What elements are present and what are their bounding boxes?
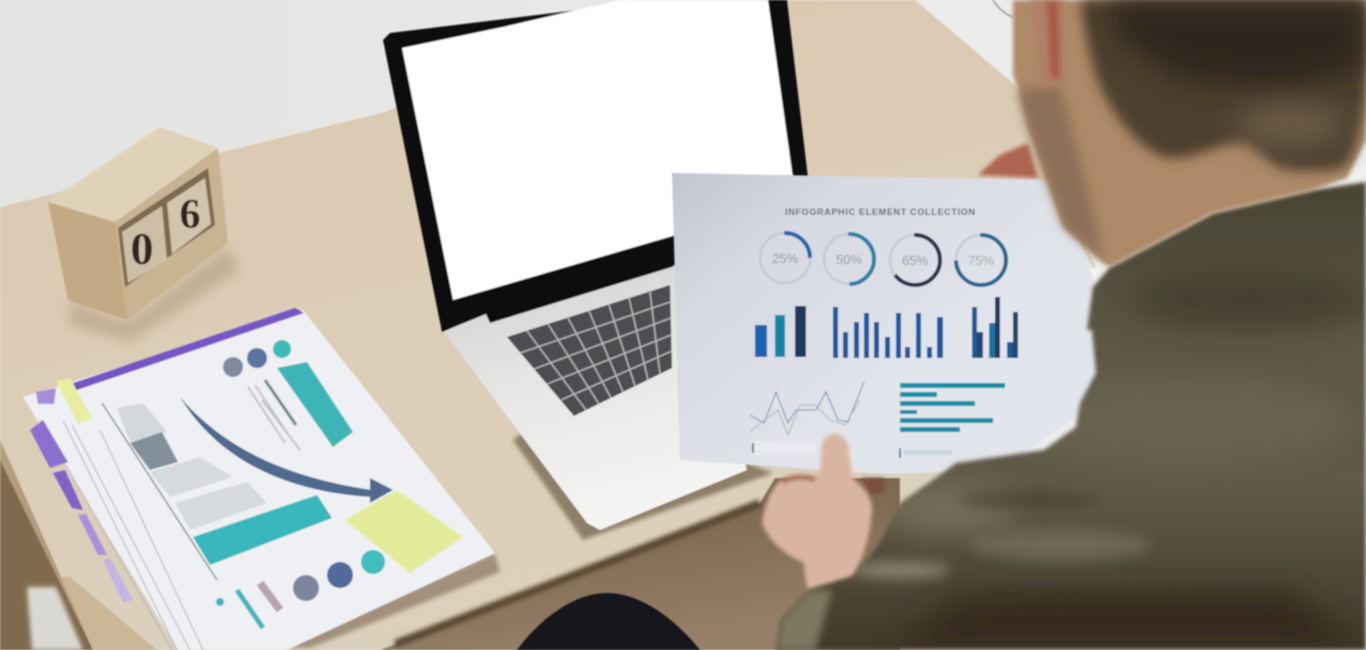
sheet paper — [672, 173, 1100, 474]
white gap beside collar — [1090, 268, 1112, 290]
purple index tabs — [30, 420, 133, 602]
stepped bar chart — [102, 403, 332, 580]
black trousers knee — [517, 593, 700, 650]
purple strip — [73, 308, 304, 391]
sheet legends — [752, 441, 952, 458]
calendar digit 6: 6 — [180, 192, 200, 238]
shirt highlights and folds — [776, 270, 1366, 650]
under-desk shadow area — [380, 478, 900, 650]
keyboard — [507, 285, 672, 416]
horizontal bar chart — [900, 383, 1005, 432]
yellow flag — [56, 378, 92, 424]
paper sheets — [23, 310, 495, 650]
glasses strap — [993, 0, 1013, 17]
circle icons top — [223, 340, 291, 377]
bottom teal label — [216, 583, 280, 628]
line chart — [750, 382, 864, 435]
hand with thumb — [762, 434, 884, 590]
laptop bezel — [383, 0, 808, 332]
teal card — [277, 362, 353, 447]
infographic sheet held by man — [672, 173, 1112, 474]
ring 75%: 75% — [968, 253, 994, 268]
ring 65% — [890, 235, 940, 285]
shirt — [770, 180, 1366, 650]
laptop shadow — [513, 430, 773, 540]
ring 50%: 50% — [836, 252, 862, 267]
ring 25% — [760, 233, 810, 283]
beard shadow — [1018, 85, 1105, 262]
stack shadow — [280, 553, 500, 648]
ring 65%: 65% — [902, 253, 928, 268]
bar chart 1 — [755, 306, 806, 357]
wooden calendar block — [48, 127, 240, 342]
hair — [1080, 0, 1366, 171]
ring 75% — [956, 235, 1006, 285]
ring 25%: 25% — [772, 251, 798, 266]
bar chart 3 — [972, 297, 1018, 358]
curved arrow — [180, 397, 393, 503]
yellow sticky note — [345, 490, 463, 573]
ring 50% — [824, 234, 874, 284]
report stack on desk — [23, 308, 500, 650]
circle icons bottom — [293, 550, 385, 601]
bar chart 2 — [833, 307, 943, 358]
neck and face — [1013, 0, 1366, 267]
far hand behind sheet — [978, 143, 1038, 178]
laptop screen — [402, 0, 796, 300]
laptop — [383, 0, 808, 540]
laptop base — [444, 262, 747, 530]
text block on report — [248, 380, 300, 450]
calendar digit 0: 0 — [130, 223, 154, 274]
ear — [1030, 0, 1065, 86]
man holding the sheet — [517, 0, 1366, 650]
sheet title: INFOGRAPHIC ELEMENT COLLECTION — [785, 207, 975, 217]
